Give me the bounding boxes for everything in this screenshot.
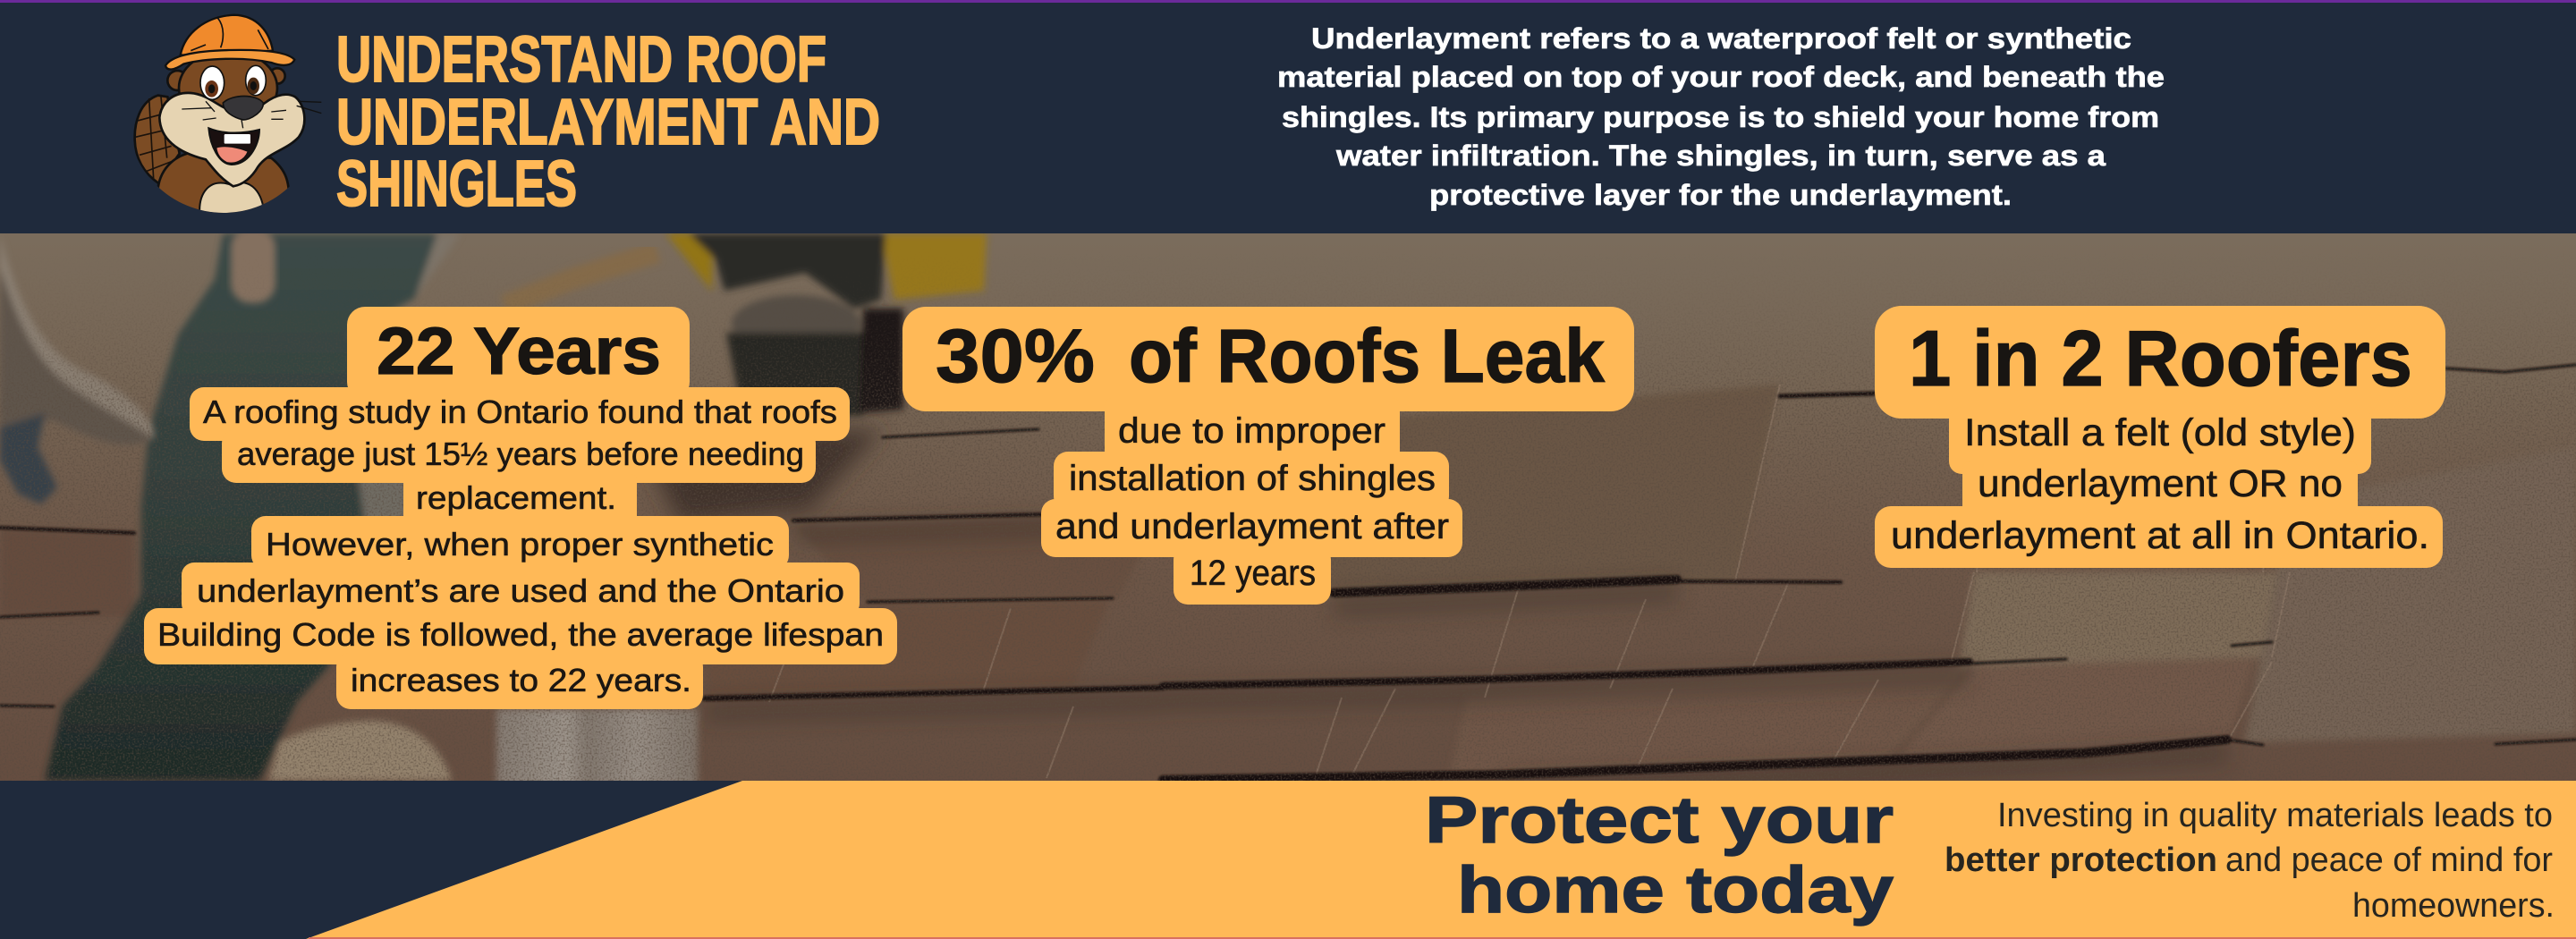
- tool handle: [231, 228, 275, 303]
- stat description: [157, 393, 884, 698]
- shingle shadow lines: [0, 365, 2576, 780]
- stat description: underlayment OR no: [1978, 462, 2343, 505]
- beaver nose: [223, 96, 263, 120]
- logo: beaver mascot with hard hat: [135, 15, 321, 217]
- hard hat: [165, 15, 294, 70]
- intro text block: shingles. Its primary purpose is to shield your home from: [1282, 101, 2159, 133]
- call to action heading: Protect your: [1425, 784, 1894, 857]
- roofer's leg: [45, 233, 461, 781]
- stat description: Building Code is followed, the average lifespan: [157, 616, 884, 653]
- stat description: underlayment at all in Ontario.: [1891, 514, 2429, 557]
- beaver tail: [135, 96, 180, 183]
- title: [336, 24, 880, 220]
- stat heading: 30%: [936, 314, 1095, 398]
- title: UNDERLAYMENT AND: [336, 87, 880, 158]
- boot: [268, 721, 452, 781]
- stat description: underlayment’s are used and the Ontario: [197, 572, 844, 609]
- nail gun: [666, 233, 987, 416]
- call to action text: Investing in quality materials leads to: [1997, 797, 2553, 834]
- intro text block: material placed on top of your roof deck, and beneath the: [1277, 61, 2165, 93]
- roofer's glove: [0, 234, 154, 504]
- intro text block: protective layer for the underlayment.: [1429, 179, 2012, 211]
- title: UNDERSTAND ROOF: [336, 24, 826, 96]
- call to action heading: [1425, 784, 1894, 926]
- beaver head: [179, 51, 277, 125]
- stat panel: 30% of Roofs Leak: [902, 307, 1634, 605]
- stat panel: 22 Years: [144, 307, 897, 709]
- stat description: [1055, 411, 1449, 593]
- stat panel: 1 in 2 Roofers: [1875, 306, 2445, 568]
- beaver whiskers: [182, 101, 321, 128]
- stat description: increases to 22 years.: [351, 662, 691, 698]
- stat description: [1891, 411, 2429, 557]
- intro text block: Underlayment refers to a waterproof felt or synthetic: [1311, 22, 2131, 55]
- bottom banner: [0, 781, 2576, 939]
- shingle seams: [768, 385, 2291, 778]
- stat heading: 22 Years: [377, 314, 661, 388]
- beaver mouth: [208, 128, 259, 165]
- stat heading: of Roofs Leak: [1129, 314, 1605, 398]
- call to action text: [1945, 797, 2555, 925]
- stat description: Install a felt (old style): [1964, 411, 2356, 454]
- beaver body: [158, 152, 289, 217]
- stat description: However, when proper synthetic: [266, 526, 774, 563]
- intro text block: water infiltration. The shingles, in turn, serve as a: [1335, 140, 2106, 172]
- plank: [496, 709, 698, 785]
- beaver teeth: [225, 134, 250, 144]
- stat description: due to improper: [1118, 411, 1385, 451]
- beaver ears: [167, 68, 285, 90]
- air hose: [504, 252, 657, 306]
- stat description: replacement.: [416, 479, 616, 516]
- stat description: 12 years: [1190, 554, 1316, 593]
- beaver tongue: [216, 147, 248, 163]
- photo grain texture: [0, 317, 2576, 781]
- stat heading: [936, 314, 1605, 398]
- stat description: A roofing study in Ontario found that roofs: [203, 393, 837, 430]
- stat description: installation of shingles: [1069, 459, 1436, 498]
- roof shadow under roofer: [638, 429, 883, 523]
- call to action heading: home today: [1457, 854, 1894, 926]
- stat description: and underlayment after: [1055, 507, 1449, 546]
- stat heading: 1 in 2 Roofers: [1909, 314, 2412, 402]
- beaver eyes: [200, 65, 266, 99]
- call to action text: and peace of mind for: [2225, 842, 2553, 879]
- title: SHINGLES: [336, 148, 577, 220]
- intro text block: [1277, 22, 2165, 211]
- shadow bands under shingle courses: [705, 525, 2227, 787]
- beaver cheeks and muzzle: [159, 93, 304, 186]
- top header band: [0, 0, 2576, 233]
- stat description: average just 15½ years before needing: [237, 436, 804, 472]
- call to action text: better protection: [1945, 842, 2217, 879]
- background photo: roof shingles with roofer: [0, 228, 2576, 787]
- call to action text: homeowners.: [2352, 887, 2555, 925]
